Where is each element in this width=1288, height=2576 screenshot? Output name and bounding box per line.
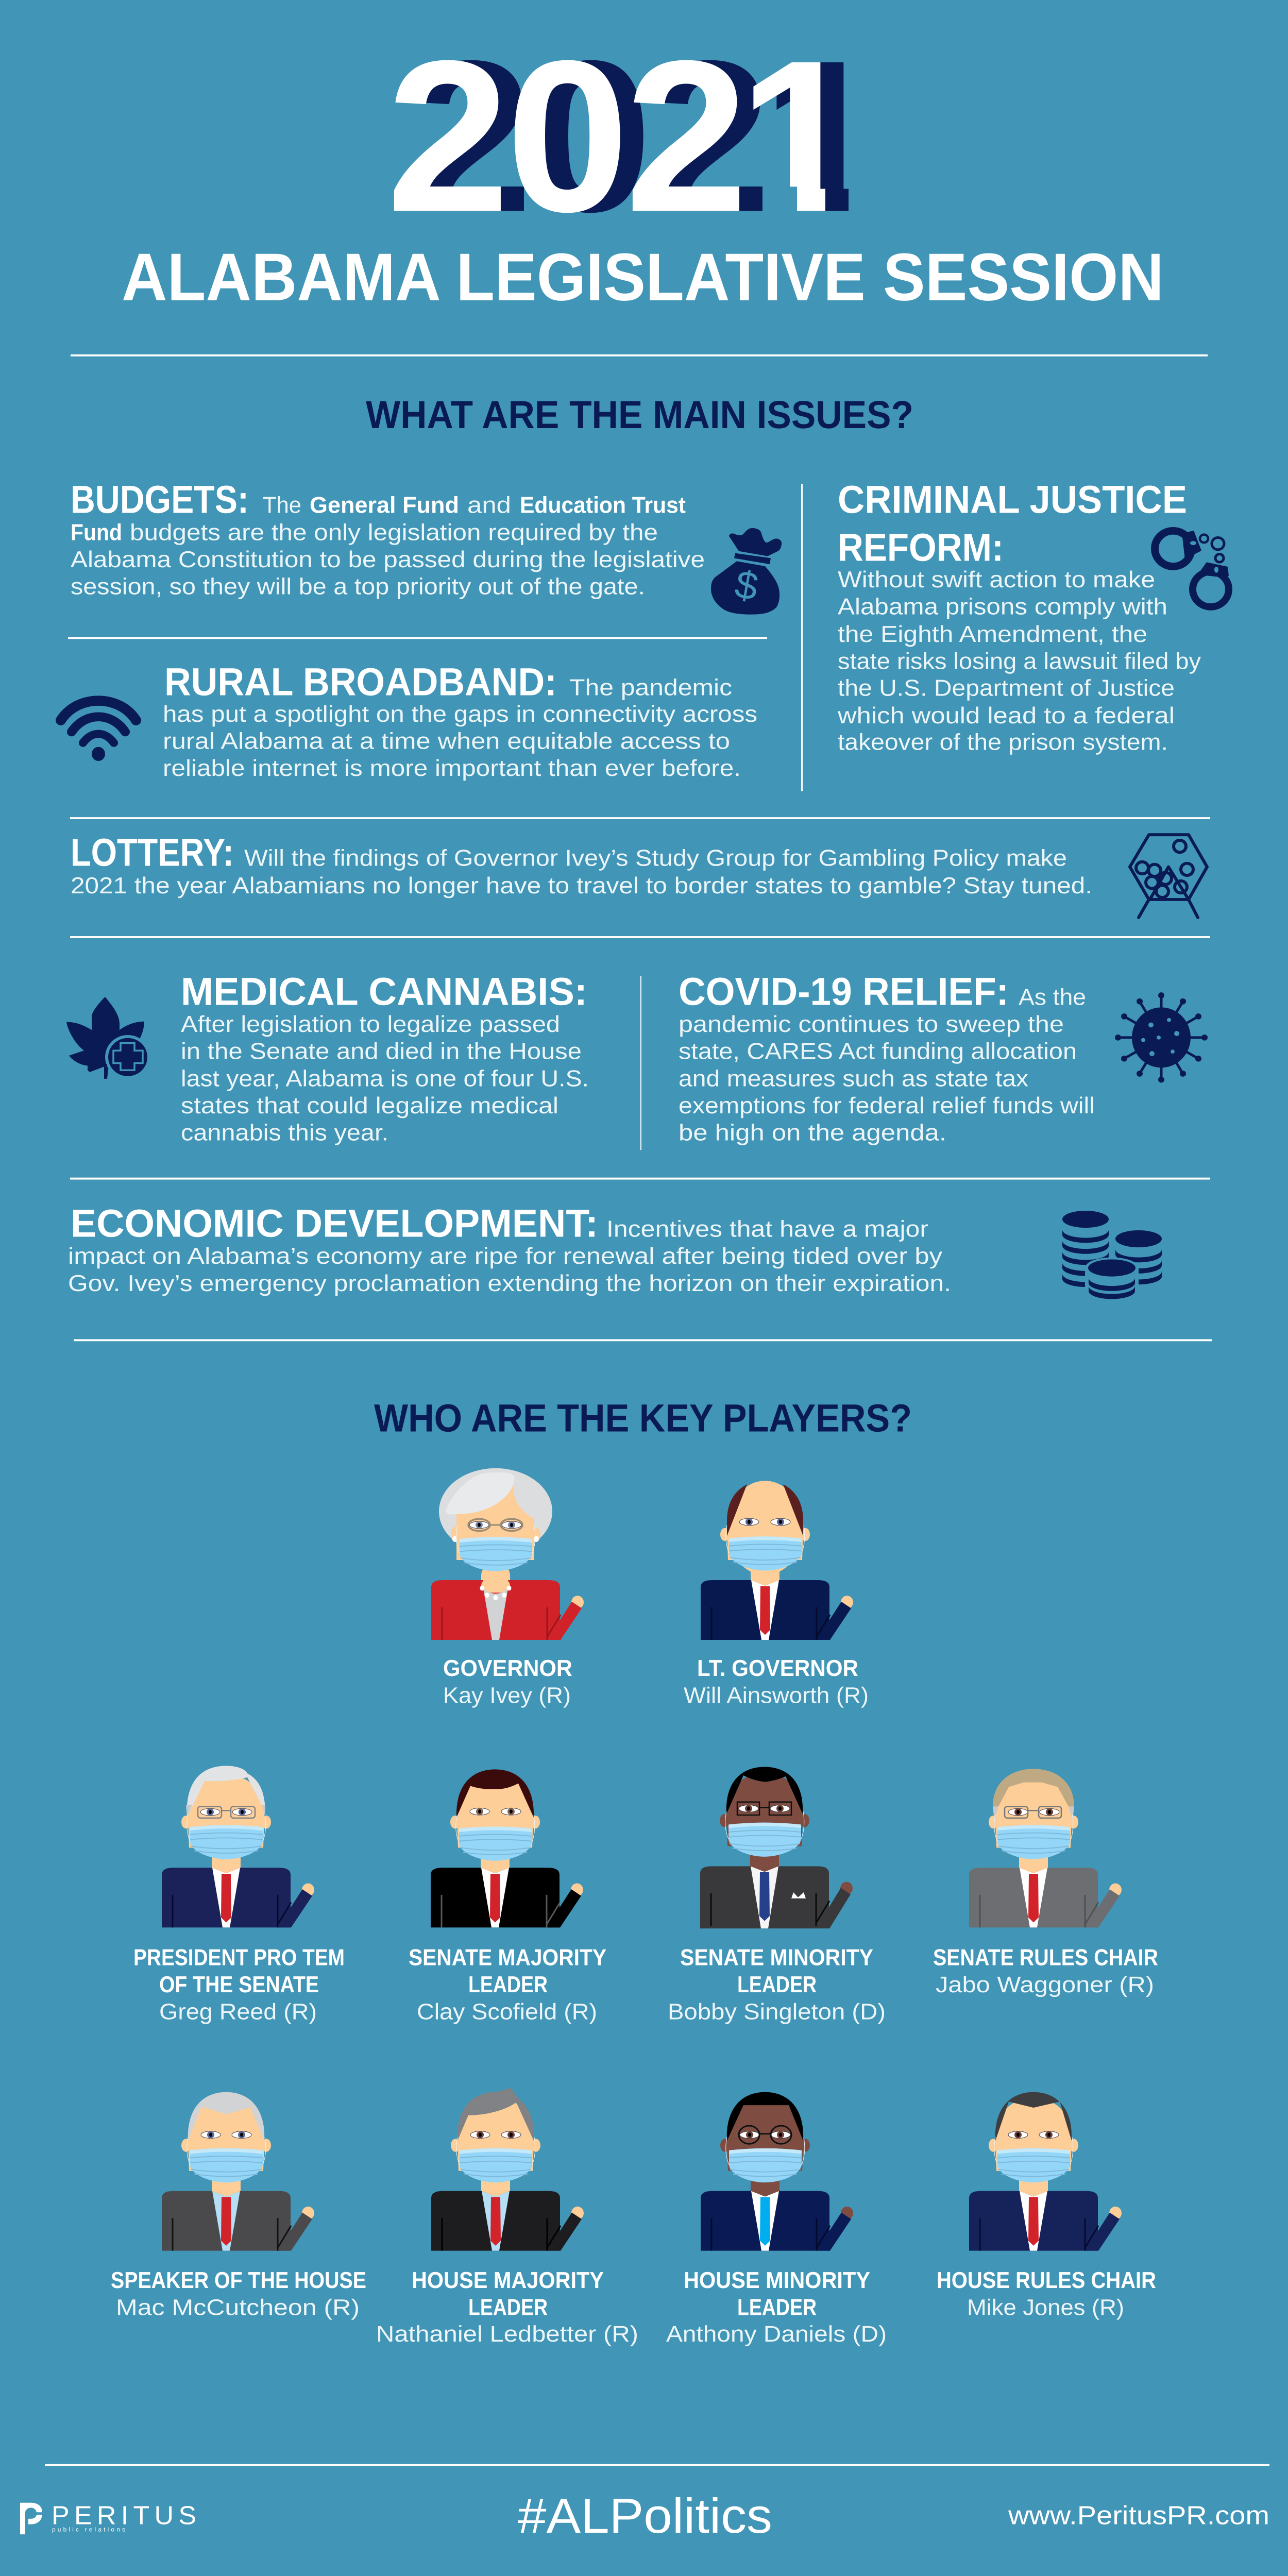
label: senate minority leader: LEADER xyxy=(737,1971,817,1997)
text: economic development body: Gov. Ivey’s emergency proclamation extending the horizon on their expiration. xyxy=(68,1270,951,1296)
text: medical cannabis body xyxy=(181,1011,589,1145)
panel: economic development xyxy=(68,1201,1162,1299)
figure: Mac McCutcheon xyxy=(162,2092,314,2251)
label: house majority leader: LEADER xyxy=(468,2294,548,2320)
label: house rules chair: HOUSE RULES CHAIR xyxy=(937,2267,1156,2293)
label: president pro tem: Greg Reed (R) xyxy=(159,1999,317,2024)
heading: rural broadband: RURAL BROADBAND: xyxy=(164,659,557,704)
text: criminal justice body: state risks losing a lawsuit filed by xyxy=(838,648,1201,674)
text: rural broadband body: The pandemic xyxy=(569,674,732,700)
text: lottery body: 2021 the year Alabamians no longer have to travel to border states to gamble? Stay tuned. xyxy=(71,872,1092,899)
label: governor xyxy=(443,1655,572,1708)
icon: Peritus mark xyxy=(20,2503,42,2534)
figure: Bobby Singleton xyxy=(700,1767,853,1928)
text: medical cannabis body: After legislation to legalize passed xyxy=(181,1011,560,1037)
heading: economic development: ECONOMIC DEVELOPMENT: xyxy=(71,1201,598,1245)
text: budgets body: Fund xyxy=(71,519,122,545)
figure: Nathaniel Ledbetter xyxy=(431,2088,584,2251)
icon: cannabis leaf with medical cross xyxy=(66,997,150,1079)
text: rural broadband body: rural Alabama at a time when equitable access to xyxy=(163,728,730,754)
player: house minority leader xyxy=(666,2092,887,2347)
figure: Mike Jones xyxy=(969,2092,1122,2251)
title: 2021: 2021 xyxy=(410,16,885,257)
label: speaker of the house: SPEAKER OF THE HOUSE xyxy=(111,2267,366,2293)
heading: covid-19 relief: COVID-19 RELIEF: xyxy=(679,969,1009,1013)
text: budgets body: and xyxy=(467,492,511,518)
label: house minority leader: HOUSE MINORITY xyxy=(684,2267,870,2293)
text: rural broadband body: reliable internet is more important than ever before. xyxy=(163,755,741,781)
figure: Kay Ivey xyxy=(431,1468,584,1640)
player: speaker of the house xyxy=(111,2092,366,2320)
player: senate majority leader xyxy=(409,1769,606,2024)
icon: money bag xyxy=(711,528,782,615)
label: senate minority leader: SENATE MINORITY xyxy=(680,1944,873,1970)
figure: Greg Reed xyxy=(162,1766,314,1927)
figure: Anthony Daniels xyxy=(701,2092,853,2251)
panel: medical cannabis xyxy=(66,969,589,1145)
player: lt. governor xyxy=(684,1481,869,1708)
heading: criminal justice reform: REFORM: xyxy=(838,525,1004,569)
icon: handcuffs xyxy=(1155,531,1229,607)
panel: criminal justice reform xyxy=(837,478,1229,755)
footer website: www.PeritusPR.com xyxy=(1008,2501,1269,2530)
title: 2021: 2021 xyxy=(386,16,861,257)
label: lt. governor xyxy=(684,1655,869,1708)
text: economic development body: impact on Alabama’s economy are ripe for renewal after being tided over by xyxy=(68,1243,942,1269)
label: senate majority leader xyxy=(409,1944,606,2024)
text: lottery body: Will the findings of Governor Ivey’s Study Group for Gambling Policy make xyxy=(244,845,1067,871)
heading: medical cannabis: MEDICAL CANNABIS: xyxy=(181,969,587,1013)
text: covid relief body xyxy=(679,984,1095,1145)
label: lt. governor: Will Ainsworth (R) xyxy=(684,1683,869,1708)
text: medical cannabis body: cannabis this year. xyxy=(181,1120,388,1145)
heading: criminal justice reform xyxy=(838,478,1187,569)
panel: rural broadband xyxy=(61,659,757,781)
heading: budgets: BUDGETS: xyxy=(71,478,249,521)
label: house majority leader: HOUSE MAJORITY xyxy=(412,2267,604,2293)
figure: Jabo Waggoner xyxy=(969,1769,1122,1927)
player: house rules chair xyxy=(937,2092,1156,2320)
label: house rules chair: Mike Jones (R) xyxy=(967,2294,1124,2320)
figure: Clay Scofield xyxy=(431,1769,583,1927)
label: house minority leader xyxy=(666,2267,887,2347)
player: governor xyxy=(431,1468,584,1708)
icon: coronavirus xyxy=(1115,992,1208,1083)
text: rural broadband body xyxy=(163,674,757,781)
icon: lottery machine xyxy=(1130,835,1207,918)
icon: wifi xyxy=(61,701,136,761)
text: budgets body: General Fund xyxy=(310,492,459,518)
text: covid relief body: and measures such as state tax xyxy=(679,1065,1028,1091)
text: criminal justice body xyxy=(837,566,1201,755)
text: covid relief body: pandemic continues to sweep the xyxy=(679,1011,1064,1037)
player: house majority leader xyxy=(376,2088,638,2347)
label: speaker of the house xyxy=(111,2267,366,2320)
text: criminal justice body: the U.S. Department of Justice xyxy=(838,674,1175,701)
footer logo: Peritus: PERITUS xyxy=(52,2501,196,2530)
text: medical cannabis body: in the Senate and died in the House xyxy=(181,1038,582,1064)
player: president pro tem xyxy=(133,1766,345,2024)
label: president pro tem: OF THE SENATE xyxy=(159,1971,319,1997)
label: house majority leader: Nathaniel Ledbetter (R) xyxy=(376,2321,638,2347)
text: budgets body: budgets are the only legislation required by the xyxy=(130,519,658,545)
text: budgets body: Education Trust xyxy=(520,492,686,518)
player: senate rules chair xyxy=(933,1769,1158,1997)
icon: coin stacks xyxy=(1062,1211,1162,1299)
icon: money bag: $ xyxy=(732,562,761,609)
text: budgets body xyxy=(71,492,705,599)
label: house rules chair xyxy=(937,2267,1156,2320)
text: medical cannabis body: last year, Alabama is one of four U.S. xyxy=(181,1065,589,1091)
label: senate majority leader: SENATE MAJORITY xyxy=(409,1944,606,1970)
label: senate rules chair xyxy=(933,1944,1158,1997)
panel: budgets xyxy=(71,478,782,615)
text: criminal justice body: Without swift action to make xyxy=(838,566,1155,592)
label: speaker of the house: Mac McCutcheon (R) xyxy=(116,2294,360,2320)
title: Alabama Legislative Session: ALABAMA LEGISLATIVE SESSION xyxy=(122,240,1164,315)
figure: Will Ainsworth xyxy=(701,1481,853,1640)
label: president pro tem xyxy=(133,1944,345,2024)
heading: lottery: LOTTERY: xyxy=(71,830,234,874)
text: economic development body xyxy=(68,1216,951,1296)
text: budgets body: session, so they will be a top priority out of the gate. xyxy=(71,573,645,599)
heading: criminal justice reform: CRIMINAL JUSTICE xyxy=(838,478,1187,521)
label: senate rules chair: SENATE RULES CHAIR xyxy=(933,1944,1158,1970)
label: governor: GOVERNOR xyxy=(443,1655,572,1681)
label: senate majority leader: Clay Scofield (R) xyxy=(417,1999,597,2024)
footer logo: Peritus: public relations xyxy=(52,2526,125,2533)
label: senate rules chair: Jabo Waggoner (R) xyxy=(936,1972,1154,1997)
label: governor: Kay Ivey (R) xyxy=(443,1683,571,1708)
text: medical cannabis body: states that could legalize medical xyxy=(181,1092,558,1118)
text: criminal justice body: Alabama prisons comply with xyxy=(838,594,1167,619)
heading: who are the key players: WHO ARE THE KEY PLAYERS? xyxy=(374,1396,912,1440)
label: president pro tem: PRESIDENT PRO TEM xyxy=(133,1944,345,1970)
text: rural broadband body: has put a spotlight on the gaps in connectivity across xyxy=(163,701,757,727)
text: covid relief body: As the xyxy=(1019,984,1086,1010)
text: lottery body xyxy=(71,845,1092,899)
icon: pocket square xyxy=(791,1892,806,1899)
text: economic development body: Incentives that have a major xyxy=(606,1216,928,1242)
text: budgets body: The xyxy=(263,492,301,518)
player: senate minority leader xyxy=(668,1767,886,2024)
text: covid relief body: state, CARES Act funding allocation xyxy=(679,1038,1077,1064)
footer hashtag: #ALPolitics xyxy=(518,2488,772,2544)
text: criminal justice body: the Eighth Amendment, the xyxy=(838,621,1147,647)
heading: what are the main issues: WHAT ARE THE MAIN ISSUES? xyxy=(366,393,913,437)
text: criminal justice body: which would lead to a federal xyxy=(837,702,1175,728)
title: 2021 xyxy=(394,60,849,213)
text: covid relief body: be high on the agenda. xyxy=(679,1120,946,1145)
label: senate minority leader: Bobby Singleton (D) xyxy=(668,1999,886,2024)
text: covid relief body: exemptions for federal relief funds will xyxy=(679,1092,1095,1118)
label: lt. governor: LT. GOVERNOR xyxy=(697,1655,858,1681)
label: house minority leader: Anthony Daniels (D) xyxy=(666,2321,887,2347)
text: budgets body: Alabama Constitution to be passed during the legislative xyxy=(71,546,705,572)
label: senate majority leader: LEADER xyxy=(468,1971,548,1997)
text: criminal justice body: takeover of the prison system. xyxy=(838,729,1168,755)
label: senate minority leader xyxy=(668,1944,886,2024)
panel: covid-19 relief xyxy=(679,969,1208,1145)
label: house majority leader xyxy=(376,2267,638,2347)
label: house minority leader: LEADER xyxy=(737,2294,817,2320)
panel: lottery xyxy=(71,830,1207,918)
